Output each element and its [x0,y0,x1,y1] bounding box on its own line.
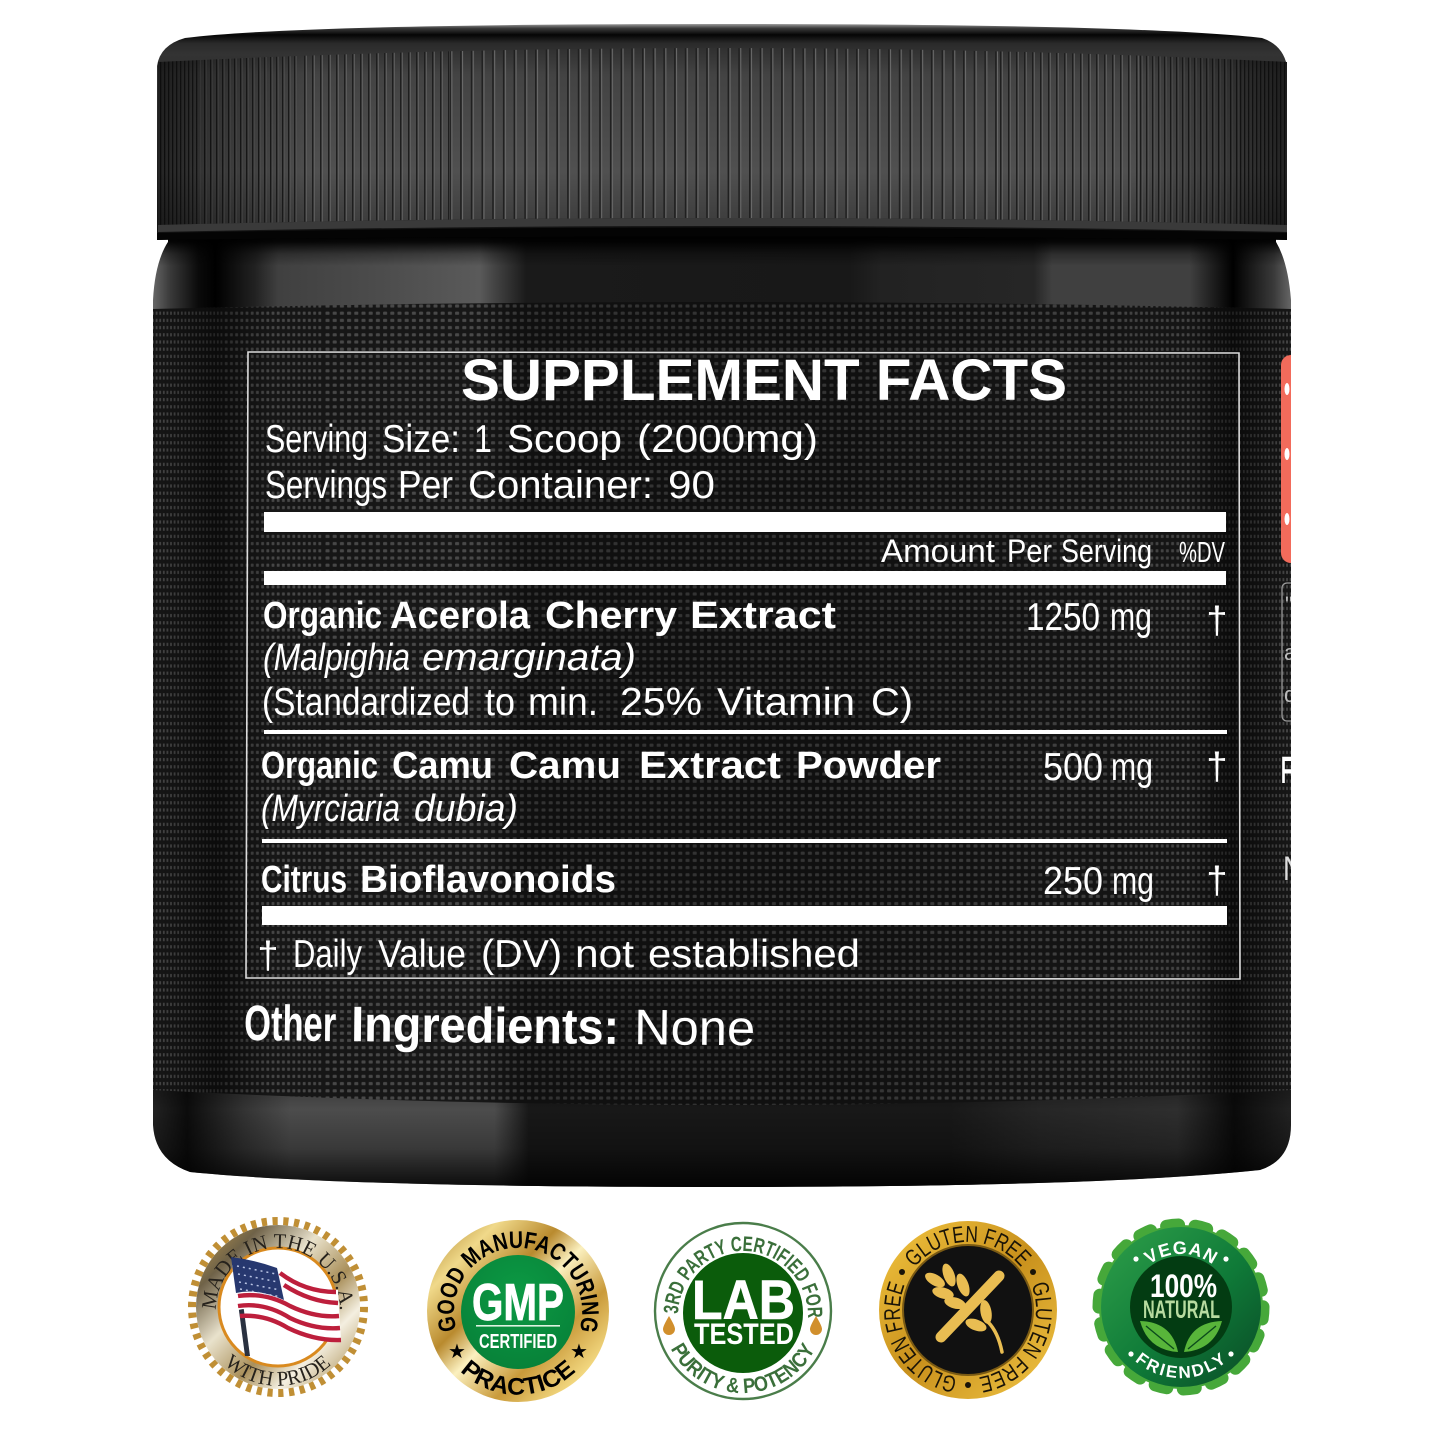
ingredient: camu camu: Extract [639,745,781,787]
column headers: Serving [1061,533,1152,569]
ingredient: acerola cherry: Extract [690,595,836,637]
jar body [153,234,1291,1190]
ingredient: acerola cherry: 25% [620,681,702,724]
badge: lab tested: LAB [692,1268,795,1331]
ingredient: acerola cherry: (Standardized [262,681,470,724]
side label: red panel and cropped text: FR [1281,750,1305,792]
ingredient: acerola cherry: Acerola [390,595,531,637]
ingredient: camu camu: Organic [261,745,378,787]
badge: made in the USA: MADE IN THE U.S.A. [202,1234,352,1310]
badge: vegan 100% natural [1092,1218,1270,1396]
supplement facts panel [246,348,1240,979]
badge: made in the USA [188,1217,368,1397]
footnote: (DV) [481,933,562,976]
ingredient: citrus bioflavonoids: 250 [1043,860,1103,903]
disclaimer box: d [1284,682,1296,707]
badge: vegan 100% natural: NATURAL [1143,1296,1220,1324]
column headers: Amount [881,533,995,569]
serving info: Serving [265,418,368,461]
cropped side text: N [1283,850,1303,888]
ingredient: camu camu: Powder [796,745,941,787]
badge: vegan 100% natural: FRIENDLY [1136,1352,1224,1378]
divider [262,839,1227,843]
ingredient: camu camu [261,745,1228,830]
ingredient: acerola cherry: Cherry [545,595,677,637]
column headers: Per [1007,533,1052,569]
other ingredients: Other [244,995,336,1052]
leaves [1140,1321,1222,1352]
ingredient: citrus bioflavonoids: † [1206,860,1228,902]
badge: lab tested: 3RD PARTY CERTIFIED FOR [664,1236,822,1318]
badge: GMP certified: ★ [448,1341,466,1363]
footnote: established [648,933,860,976]
ingredient: acerola cherry: Vitamin [717,681,855,724]
thick divider [262,906,1227,925]
disclaimer box: "T [1285,592,1306,617]
badge: GMP certified: ★ [570,1341,588,1363]
ingredient: acerola cherry: emarginata) [422,637,636,679]
thick divider [264,512,1226,532]
serving info: Size: [382,418,460,461]
serving info: 90 [668,464,715,507]
ingredient: camu camu: Camu [509,745,621,787]
ingredient: acerola cherry: (Malpighia [263,637,410,679]
ingredient: acerola cherry: to [485,681,515,724]
ingredient: camu camu: Camu [392,745,493,787]
badge: gluten free [879,1221,1057,1399]
heading: SUPPLEMENT FACTS [461,348,1067,413]
cropped side text [1282,756,1291,880]
badge: GMP certified: GMP [472,1274,564,1332]
jar: black supplement container [153,24,1291,1190]
footnote [257,933,860,977]
badge: GMP certified: PRACTICE [461,1359,576,1395]
column headers: %DV [1179,537,1225,569]
badge: gluten free: GLUTEN FREE [884,1281,955,1392]
badge: vegan 100% natural: VEGAN [1142,1241,1218,1264]
ingredient: camu camu: mg [1111,746,1153,789]
other ingredients: None [634,999,755,1056]
red callout panel [1281,355,1291,563]
footnote: not [575,933,634,976]
ingredient: acerola cherry: mg [1110,596,1152,639]
ingredient: citrus bioflavonoids [261,859,1228,903]
ingredient: acerola cherry: min. [528,681,598,724]
ingredient: camu camu: dubia) [414,788,518,830]
ingredient: acerola cherry: 1250 [1026,596,1100,639]
label dot texture [153,295,1291,1120]
ingredient: acerola cherry: Organic [263,595,382,637]
disclaimer box: a [1284,640,1297,665]
jar lid [157,24,1287,240]
ingredient: citrus bioflavonoids: Citrus [261,859,347,901]
column headers [881,533,1225,569]
ingredient: camu camu: 500 [1043,746,1103,789]
footnote: Daily [293,933,362,976]
serving info: Scoop [507,418,622,461]
badge: lab tested: TESTED [694,1318,794,1351]
ingredient: acerola cherry: C) [871,681,913,724]
panel border [246,352,1240,979]
badge: GMP certified: CERTIFIED [479,1331,557,1353]
badge: vegan 100% natural: 100% [1150,1268,1217,1304]
serving info [265,418,818,507]
badge: made in the USA: WITH PRIDE [228,1354,330,1386]
serving info: Per [398,464,453,507]
ingredient: acerola cherry: † [1206,600,1228,642]
divider [264,571,1226,585]
badge: lab tested: PURITY & POTENCY [671,1342,813,1394]
badge: gluten free: GLUTEN FREE [906,1226,1032,1267]
footnote: Value [378,933,466,976]
ingredient: citrus bioflavonoids: mg [1112,860,1154,903]
other ingredients [244,995,755,1056]
other ingredients: Ingredients: [351,996,619,1055]
footnote: † [257,935,279,977]
side label: red panel and cropped text [1281,355,1291,880]
ingredient: citrus bioflavonoids: Bioflavonoids [360,859,616,901]
serving info: 1 [474,418,492,461]
serving info: Container: [468,464,653,507]
badge: lab tested [654,1222,832,1400]
badge: GMP certified [427,1220,609,1402]
divider [264,730,1227,734]
badge: GMP certified: GOOD MANUFACTURING [437,1231,599,1332]
ingredient: camu camu: (Myrciaria [261,788,400,830]
ingredient: camu camu: † [1206,746,1228,788]
serving info: Servings [265,464,387,507]
disclaimer box [1281,582,1291,722]
flag [231,1257,341,1356]
badge: gluten free: GLUTEN FREE [979,1282,1052,1393]
ingredient: acerola cherry [262,595,1228,724]
serving info: (2000mg) [637,418,818,461]
wheat icon with slash [923,1262,1002,1352]
